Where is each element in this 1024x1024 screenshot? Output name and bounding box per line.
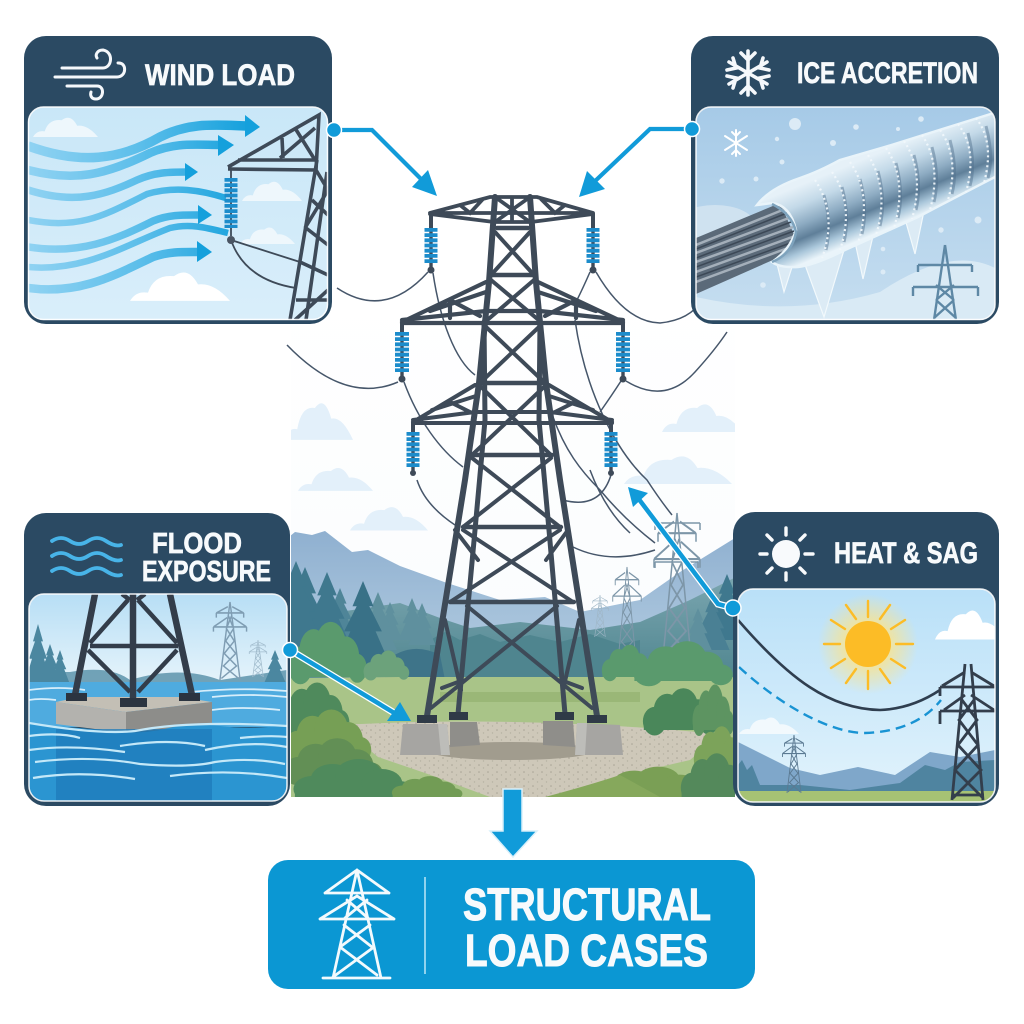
hanger stubs	[402, 214, 623, 432]
heading: wind load: WIND LOAD	[145, 59, 295, 92]
panel inner border	[29, 594, 287, 801]
base plates	[417, 712, 607, 723]
panel: heat and sag	[733, 512, 1005, 806]
ice ribs	[824, 126, 991, 250]
tower steel	[402, 197, 623, 716]
panel: structural load cases	[268, 860, 755, 989]
middle crossarm	[402, 282, 623, 323]
concrete block	[56, 697, 212, 733]
arrow: flood to tower	[282, 642, 411, 721]
meadow shading	[440, 692, 640, 702]
heat illustration	[738, 589, 1005, 802]
snow hills	[696, 205, 750, 238]
gravel pad	[340, 722, 720, 797]
panel frame	[733, 512, 999, 806]
submerged block	[56, 729, 212, 801]
tower legs	[75, 594, 192, 700]
small snowflake	[725, 130, 747, 156]
ice illustration	[675, 107, 997, 320]
flood illustration	[25, 594, 287, 801]
panel: wind load	[24, 36, 332, 324]
mountains	[738, 742, 995, 800]
icon: sun	[760, 528, 813, 580]
clouds	[739, 611, 1005, 734]
conductor strands	[696, 203, 800, 294]
ice speckle ribs	[815, 118, 988, 258]
legs	[427, 197, 597, 716]
heading: structural load cases: LOAD CASES	[465, 925, 708, 976]
panel frame	[24, 36, 332, 324]
main lattice tower	[398, 197, 626, 755]
heading: flood exposure	[142, 528, 271, 588]
heading: structural load cases: STRUCTURAL	[463, 879, 711, 930]
stream arrowheads	[185, 115, 260, 262]
arrow: down to load cases	[490, 789, 537, 857]
icon: snowflake	[727, 51, 769, 95]
foreground tower	[940, 664, 995, 800]
snow dots	[719, 116, 982, 288]
panel frame	[24, 513, 290, 806]
horizontals	[450, 228, 574, 602]
water lines back	[29, 688, 287, 710]
distant treeline	[25, 624, 287, 684]
panel: ice accretion	[675, 36, 999, 324]
insulators	[398, 227, 626, 476]
treeline	[738, 760, 995, 795]
mountains	[291, 531, 733, 630]
small tower	[782, 735, 806, 793]
icon: water waves	[52, 538, 121, 576]
concrete footings	[400, 721, 623, 755]
distant tower	[913, 245, 978, 320]
icicles	[777, 211, 924, 317]
icon: wind	[55, 50, 125, 99]
cross bracing	[431, 232, 592, 708]
background towers	[591, 513, 700, 658]
water back	[29, 682, 287, 727]
meadow	[285, 677, 740, 797]
back bushes	[288, 622, 733, 686]
ice sleeve	[757, 112, 997, 267]
transmission wires	[287, 272, 727, 557]
arrow: heat to tower	[628, 487, 741, 616]
ground	[738, 791, 995, 802]
clouds	[33, 118, 302, 301]
forest	[269, 561, 748, 680]
water lines front	[29, 723, 287, 779]
tower detail	[228, 115, 328, 320]
wind illustration	[28, 107, 328, 320]
sagged conductor	[739, 667, 941, 733]
lower crossarm	[413, 385, 612, 423]
divider	[424, 877, 426, 974]
front water	[29, 724, 287, 801]
insulator	[224, 178, 238, 228]
result box	[268, 860, 755, 989]
sleeve opening rim	[772, 204, 796, 262]
sun glow	[818, 594, 918, 694]
sun	[845, 621, 891, 667]
insulator clamp	[227, 236, 235, 244]
heading: flood exposure: FLOOD	[152, 528, 242, 560]
distant towers	[213, 602, 267, 680]
wind streams	[28, 125, 248, 289]
panel: flood exposure	[24, 513, 290, 806]
arrow: wind to tower	[326, 122, 437, 196]
conductor	[738, 620, 940, 710]
panel inner border	[28, 107, 328, 320]
foreground bushes	[279, 682, 747, 803]
icon: tower	[320, 870, 394, 978]
heading: flood exposure: EXPOSURE	[142, 556, 271, 588]
sun rays	[824, 601, 913, 689]
panel inner border	[696, 107, 995, 320]
heading: structural load cases	[463, 879, 711, 976]
base plates	[66, 693, 200, 707]
arrow: ice to tower	[579, 122, 700, 197]
top crossarm	[430, 197, 593, 222]
panel inner border	[738, 589, 995, 802]
central scene background	[291, 403, 735, 797]
ground shadow	[438, 742, 584, 760]
heading: heat and sag: HEAT & SAG	[834, 537, 978, 570]
panel frame	[691, 36, 999, 324]
sky clouds	[285, 403, 742, 530]
